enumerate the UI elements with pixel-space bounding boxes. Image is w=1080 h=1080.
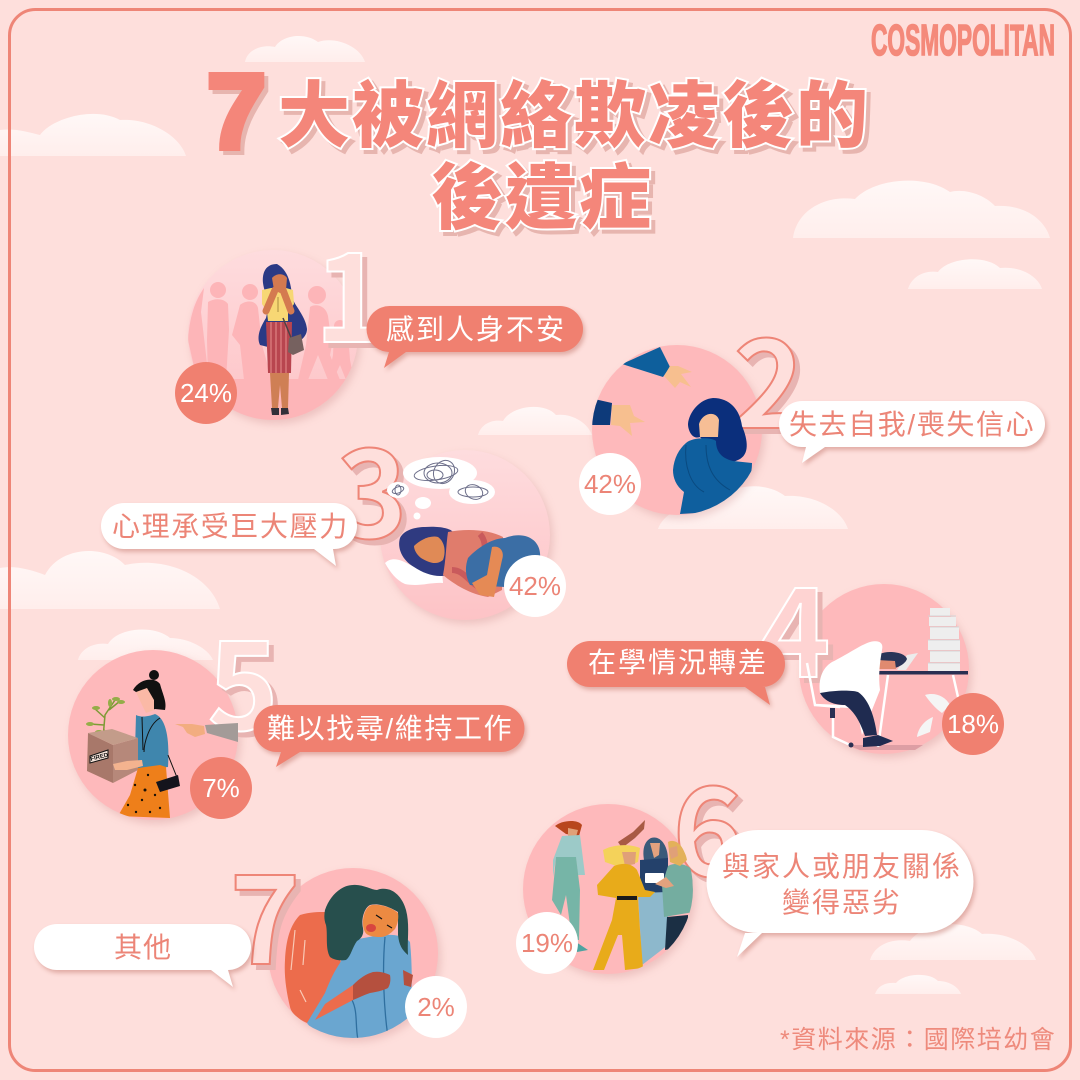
numeral 3: 3 xyxy=(337,399,407,573)
panel 2: 失去自我/喪失信心 xyxy=(579,336,1049,522)
numeral 2: 2 xyxy=(734,289,804,463)
label 3: 心理承受巨大壓力 xyxy=(112,511,349,542)
percent badge 42%: 42% xyxy=(584,469,636,499)
panel 1: 感到人身不安 xyxy=(175,252,587,426)
panel 7: 其他 xyxy=(34,868,467,1044)
illustration: hugging woman xyxy=(285,885,413,1040)
illustration: fired woman carrying box xyxy=(86,670,238,818)
label 6: 與家人或朋友關係 xyxy=(722,851,962,882)
percent badge 42% xyxy=(579,453,641,515)
percent badge 18%: 18% xyxy=(947,709,999,739)
label 5: 難以找尋/維持工作 xyxy=(267,713,513,744)
title xyxy=(207,53,870,239)
panel 4: 在學情況轉差 xyxy=(567,538,1004,755)
label 2: 失去自我/喪失信心 xyxy=(789,409,1035,440)
numeral 6: 6 xyxy=(673,737,743,911)
speech bubble 2 xyxy=(779,401,1045,463)
illustration circle 6 xyxy=(523,804,693,974)
speech bubble 3 xyxy=(101,503,357,566)
percent badge 2% xyxy=(405,976,467,1038)
numeral 4: 4 xyxy=(760,538,830,712)
speech bubble 6 xyxy=(706,830,974,957)
percent badge 24%: 24% xyxy=(180,378,232,408)
label 6 xyxy=(722,851,962,918)
label 1: 感到人身不安 xyxy=(386,314,566,345)
panel 5: 難以找尋/維持工作 xyxy=(68,640,528,826)
numeral 7: 7 xyxy=(230,825,300,999)
illustration circle 2 xyxy=(592,345,762,515)
numeral 5: 5 xyxy=(208,591,278,765)
speech bubble 7 xyxy=(34,924,251,987)
illustration: student collapsed at desk xyxy=(807,608,968,750)
illustration circle 1 xyxy=(188,250,358,420)
percent badge 7%: 7% xyxy=(202,773,240,803)
label 6: 變得惡劣 xyxy=(782,887,902,918)
percent badge 42%: 42% xyxy=(509,571,561,601)
illustration: woman covering face xyxy=(259,264,307,415)
percent badge 19% xyxy=(516,912,578,974)
source note: *資料來源：國際培幼會 xyxy=(780,1026,1056,1054)
speech bubble 1 xyxy=(367,306,583,368)
percent badge 19%: 19% xyxy=(521,928,573,958)
illustration circle 5 xyxy=(68,650,238,820)
illustration: fired woman carrying box: FIRED xyxy=(90,752,110,763)
percent badge 42% xyxy=(504,555,566,617)
illustration circle 4 xyxy=(799,584,969,754)
numeral 1: 1 xyxy=(315,203,385,377)
crowd silhouettes xyxy=(188,282,358,421)
label 4: 在學情況轉差 xyxy=(588,647,768,678)
title: 7 xyxy=(207,53,266,171)
illustration: pointing hands and hiding woman xyxy=(590,347,752,514)
panel 3: 心理承受巨大壓力 xyxy=(101,399,566,620)
panel 6: 與家人或朋友關係變得惡劣 xyxy=(516,784,978,980)
illustration: group of friends xyxy=(552,820,694,970)
speech bubble 5 xyxy=(254,705,524,767)
illustration circle 7 xyxy=(268,868,438,1038)
percent badge 18% xyxy=(942,693,1004,755)
percent badge 2%: 2% xyxy=(417,992,455,1022)
speech bubble 4 xyxy=(567,641,785,705)
title: 大被網絡欺凌後的 xyxy=(278,77,870,157)
percent badge 24% xyxy=(175,362,237,424)
percent badge 7% xyxy=(190,757,252,819)
illustration: woman lying on pillow xyxy=(385,527,540,597)
title: 後遺症 xyxy=(431,159,653,239)
illustration: thought clouds xyxy=(387,457,495,520)
illustration circle 3 xyxy=(380,450,550,620)
label 7: 其他 xyxy=(114,932,172,963)
